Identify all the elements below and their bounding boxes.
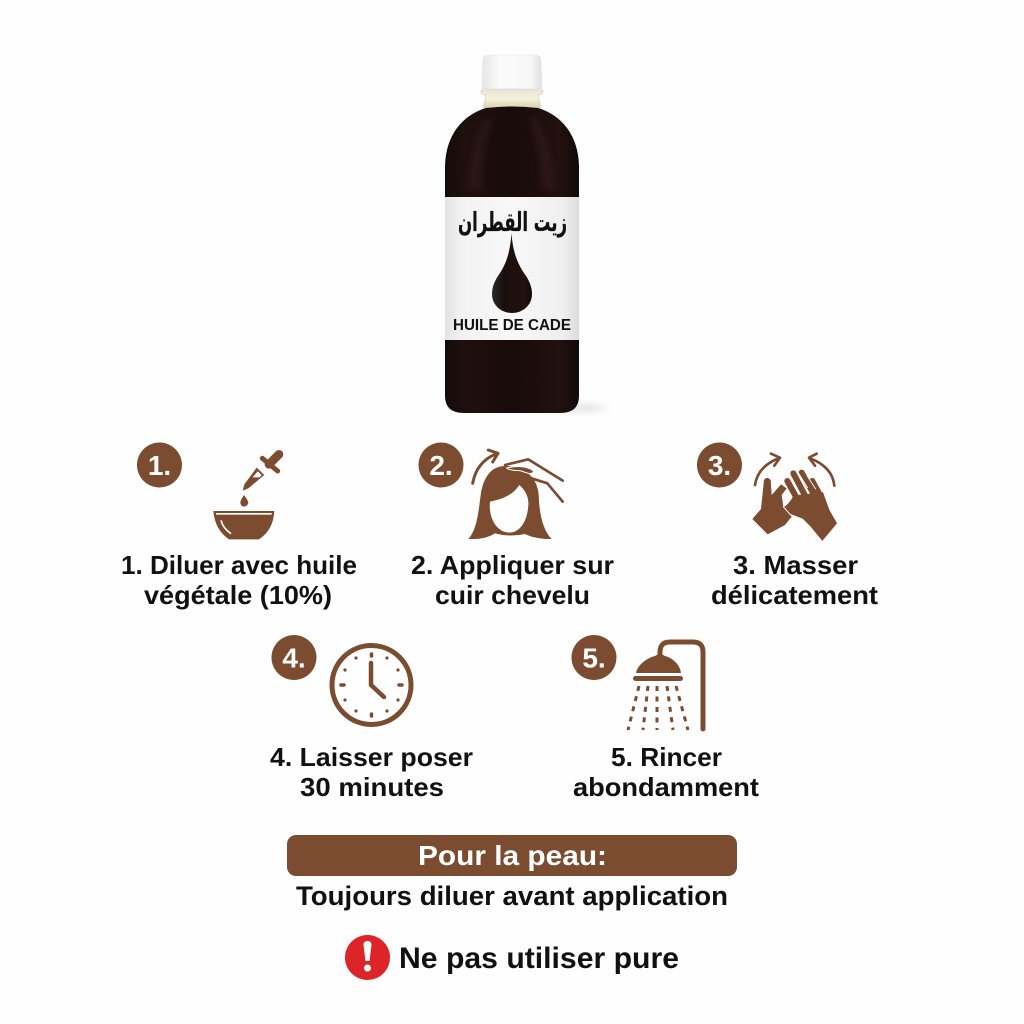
step 5 caption bbox=[573, 742, 759, 802]
step 5 bbox=[572, 635, 759, 802]
step 4 bbox=[270, 635, 473, 802]
banner: pour la peau: Pour la peau: bbox=[418, 840, 607, 871]
badge 2 bbox=[418, 442, 464, 488]
bottle cap bbox=[482, 55, 542, 89]
product bottle bbox=[445, 55, 607, 413]
icon: red exclamation bbox=[345, 935, 390, 980]
arabic label text: زيت القطران bbox=[458, 208, 567, 238]
step 5 caption: abondamment bbox=[573, 772, 759, 802]
step 1 caption bbox=[121, 550, 357, 610]
step 5 caption: 5. Rincer bbox=[611, 742, 722, 772]
badge 2: 2. bbox=[429, 450, 453, 481]
step 2 caption bbox=[411, 550, 614, 610]
step 2 caption: cuir chevelu bbox=[435, 580, 590, 610]
badge 5: 5. bbox=[582, 642, 606, 674]
icon: woman applying oil to scalp bbox=[468, 450, 563, 539]
step 3 caption: 3. Masser bbox=[733, 550, 858, 580]
step 1 bbox=[121, 442, 357, 610]
step 1 caption: végétale (10%) bbox=[144, 580, 332, 610]
dilution instruction: Toujours diluer avant application bbox=[296, 881, 728, 911]
banner: pour la peau bbox=[287, 835, 737, 876]
badge 4: 4. bbox=[282, 642, 306, 674]
icon: shower bbox=[628, 642, 703, 730]
bottle neck bbox=[481, 89, 543, 108]
icon: clock bbox=[332, 646, 411, 724]
step 2 bbox=[411, 442, 614, 610]
badge 5 bbox=[572, 635, 616, 680]
badge 4 bbox=[272, 635, 316, 680]
step 3 caption: délicatement bbox=[711, 580, 878, 610]
bottle body with dark oil bbox=[445, 106, 579, 413]
badge 1: 1. bbox=[148, 450, 171, 481]
step 4 caption bbox=[270, 742, 473, 802]
step 2 caption: 2. Appliquer sur bbox=[411, 550, 614, 580]
badge 1 bbox=[137, 442, 182, 488]
step 1 caption: 1. Diluer avec huile bbox=[121, 550, 357, 580]
warning bbox=[345, 935, 679, 980]
bottle label bbox=[445, 197, 579, 340]
badge 3: 3. bbox=[708, 450, 731, 481]
oil drop bbox=[492, 233, 532, 313]
step 4 caption: 30 minutes bbox=[300, 772, 444, 802]
badge 3 bbox=[697, 442, 742, 488]
icon: massaging hands bbox=[752, 454, 838, 542]
warning text: Ne pas utiliser pure bbox=[399, 942, 679, 975]
step 4 caption: 4. Laisser poser bbox=[270, 742, 473, 772]
label name: HUILE DE CADE bbox=[453, 317, 571, 334]
icon: dropper over bowl bbox=[213, 454, 279, 539]
step 3 bbox=[697, 442, 878, 610]
step 3 caption bbox=[711, 550, 878, 610]
